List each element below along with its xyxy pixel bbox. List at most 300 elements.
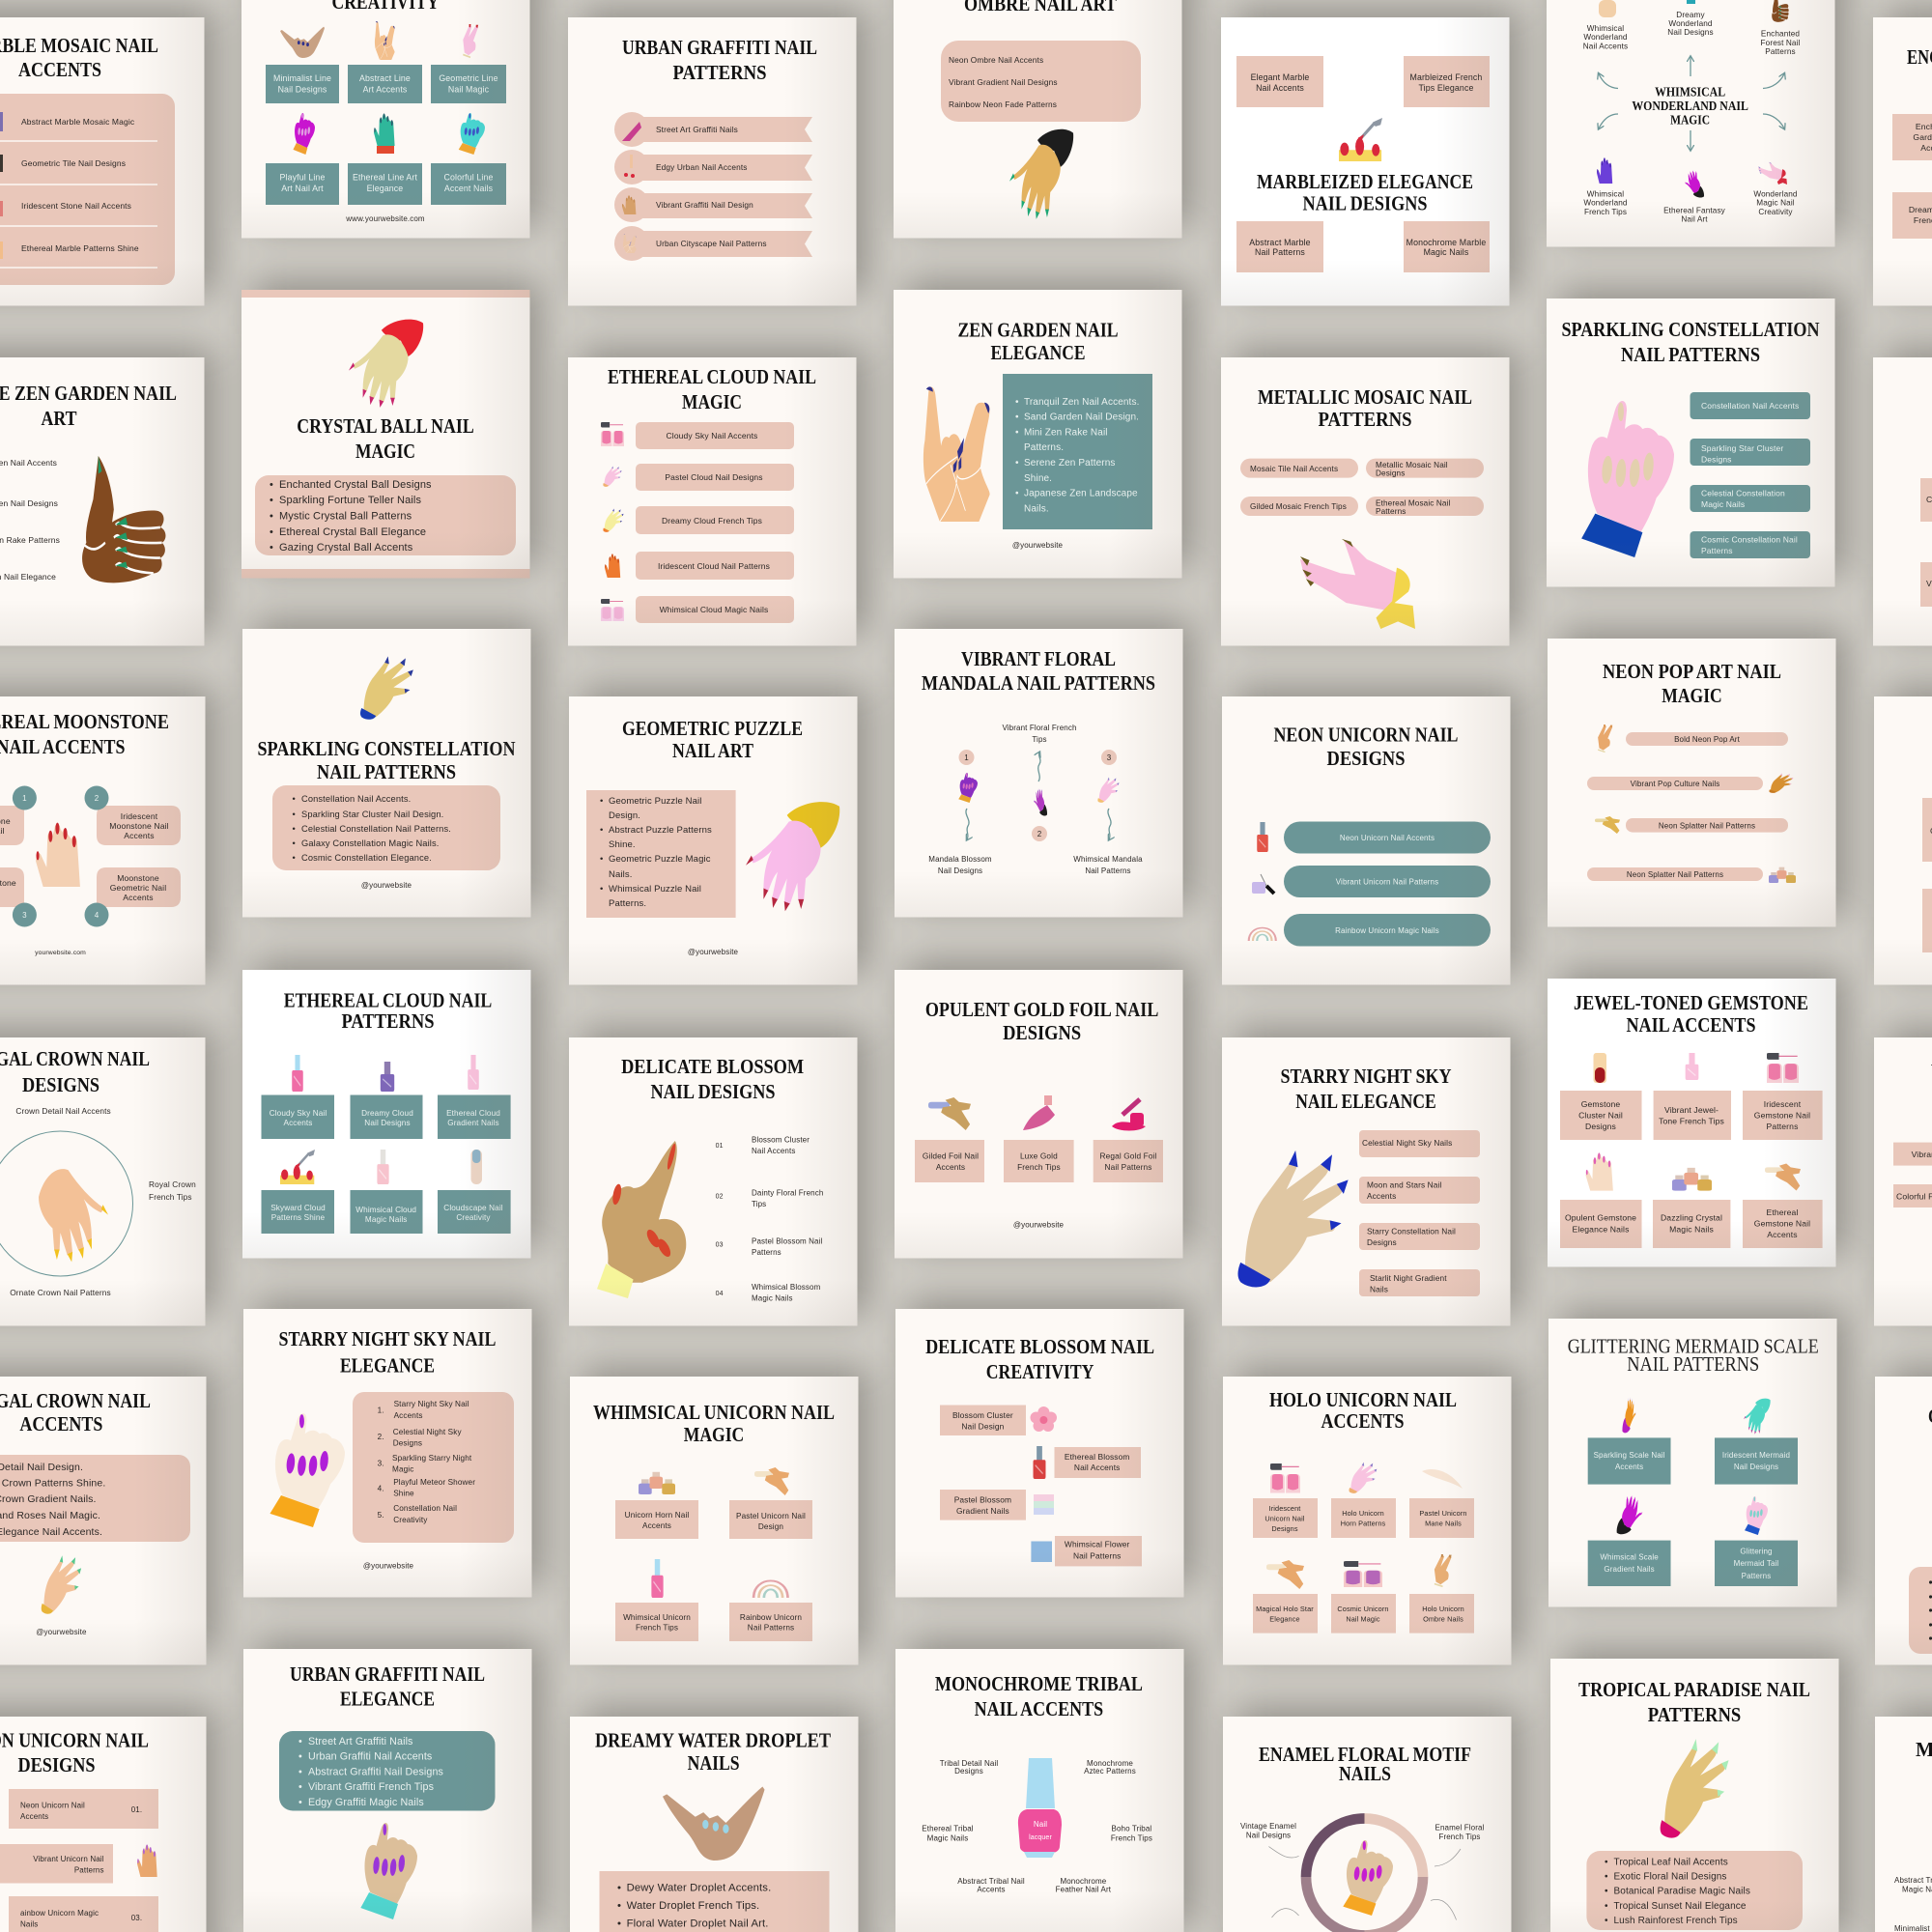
boxes: Elegance Nails — [1572, 1224, 1630, 1234]
ribbons: Edgy Urban Nail Accents — [656, 162, 748, 172]
list panel: Enchanted Crystal Ball Designs — [279, 479, 432, 491]
title — [1259, 1743, 1471, 1785]
list panel: Rainbow Neon Fade Patterns — [949, 99, 1057, 109]
boxes — [1236, 56, 1490, 272]
bottom labels: Nail Art — [1681, 214, 1708, 224]
panel: Urban Graffiti Nail Patterns — [568, 17, 856, 305]
pills: Neon Splatter Nail Patterns — [1627, 870, 1723, 879]
boxes: Starry Constellation Nail — [1367, 1227, 1456, 1236]
list panel: Mystic Crystal Ball Patterns — [279, 510, 412, 522]
teal boxes: Patterns — [1701, 546, 1733, 555]
ribbons: Urban Cityscape Nail Patterns — [656, 239, 767, 248]
icons — [1617, 1397, 1771, 1535]
circle with hand — [0, 1131, 133, 1276]
list panel: Botanical Paradise Magic Nails — [1613, 1887, 1750, 1897]
list rows: Neon Unicorn Nail — [20, 1801, 85, 1809]
teal boxes: Skyward Cloud — [270, 1204, 326, 1212]
list panel: • — [292, 794, 296, 804]
boxes: Ethereal — [1767, 1208, 1798, 1217]
numbered list panel: Accents — [394, 1411, 423, 1420]
website: @yourwebsite — [1012, 541, 1064, 550]
panel: Opulent Gold Foil Nail Designs — [895, 970, 1182, 1258]
numbered badges: 3 — [22, 911, 27, 920]
list boxes: Cloudy Sky Nail Accents — [667, 431, 757, 440]
list box: • — [617, 1883, 621, 1894]
title: ELEGANCE — [991, 341, 1086, 364]
numbered list panel: 1. — [378, 1406, 384, 1414]
boxes: Marbleized French — [1410, 72, 1482, 82]
teal boxes: Nail Magic — [448, 85, 490, 95]
icon: hand — [360, 656, 413, 720]
list boxes — [636, 422, 794, 623]
panel: Jewel-Toned Gemstone Nail Accents — [1548, 979, 1835, 1267]
icon: large polish bottle: lacquer — [1029, 1834, 1052, 1841]
top labels: Whimsical — [1587, 24, 1624, 33]
boxes: Ethereal Blossom — [1065, 1452, 1129, 1462]
boxes: Holo Unicorn — [1422, 1605, 1464, 1613]
boxes: Pastel Blossom — [954, 1494, 1011, 1504]
title: GEOMETRIC PUZZLE — [622, 717, 803, 740]
boxes: Gradient Nails — [956, 1506, 1009, 1516]
list panel: • — [270, 495, 273, 506]
teal pills: Neon Unicorn Nail Accents — [1340, 834, 1435, 842]
numbered list: Tips — [752, 1200, 766, 1208]
boxes: Gemstone — [1581, 1099, 1620, 1109]
title: ELEGANCE — [340, 1688, 435, 1711]
list panel: Geometric Tile Nail Designs — [21, 158, 126, 168]
title: HOLO UNICORN NAIL — [1269, 1388, 1457, 1411]
bottom labels: French Tips — [1584, 208, 1627, 216]
labels — [1894, 1876, 1932, 1932]
list panel: Vibrant Gradient Nail Designs — [949, 77, 1058, 87]
teal boxes: Elegance — [367, 184, 403, 193]
numbered list panel: Magic — [392, 1465, 413, 1474]
list panel: • — [1605, 1872, 1608, 1882]
icons: hands — [280, 21, 485, 155]
boxes: Gemstone Nail — [1754, 1111, 1810, 1121]
boxes: Magical Holo Star — [1256, 1605, 1314, 1613]
title: OPULENT GOLD FOIL NAIL — [925, 998, 1158, 1021]
title: TROPICAL PARADISE NAIL — [1578, 1678, 1810, 1701]
title: ETHEREAL CLOUD NAIL — [284, 988, 492, 1011]
title: NAIL ACCENTS — [975, 1697, 1103, 1720]
top labels: Wonderland — [1583, 33, 1628, 42]
labels: Vibrant Floral French — [1002, 724, 1077, 732]
title — [1269, 1388, 1457, 1433]
icon: gradient swatch — [1034, 1494, 1054, 1515]
labels: Accents — [977, 1886, 1006, 1893]
teal pills — [1284, 821, 1491, 947]
title: URBAN GRAFFITI NAIL — [290, 1662, 485, 1686]
title: DREAMY WATER DROPLET — [595, 1729, 831, 1752]
list panel — [272, 785, 500, 870]
bottom icons — [1597, 157, 1787, 197]
panel: right edge card 4 — [1874, 1037, 1932, 1325]
boxes: Opulent Gemstone — [1565, 1212, 1636, 1222]
boxes: Nail Accents — [1256, 83, 1304, 93]
labels: Monochrome — [1060, 1877, 1106, 1886]
teal boxes: Minimalist Line — [273, 73, 331, 83]
pills: Neon Splatter Nail Patterns — [1659, 822, 1755, 831]
list panel: • — [292, 853, 296, 863]
title — [595, 1729, 831, 1775]
ribbons — [614, 112, 812, 261]
title: VIBRANT FLORAL — [961, 647, 1116, 670]
numbered badges: 2 — [95, 794, 99, 803]
title — [608, 365, 816, 413]
title: WHIMSICAL UNICORN NAIL — [593, 1401, 835, 1424]
list panel: • — [292, 824, 296, 834]
title — [0, 1047, 150, 1096]
title: MONOCHROME TRIBAL — [935, 1672, 1143, 1695]
boxes: Nails — [1370, 1285, 1388, 1294]
title — [1603, 660, 1781, 707]
top labels: Dreamy — [1676, 11, 1705, 19]
panel: Urban Graffiti Nail Elegance — [243, 1649, 531, 1932]
icon: large polish bottle — [1018, 1758, 1062, 1858]
bottom labels: Whimsical — [1587, 189, 1624, 199]
numbered list: Nail Accents — [752, 1147, 795, 1155]
teal list box: • — [1015, 458, 1019, 469]
title: NAIL PATTERNS — [1621, 343, 1760, 366]
list panel: Cosmic Constellation Elegance. — [301, 853, 432, 863]
list box: Design. — [609, 810, 640, 821]
teal boxes: Cloudy Sky Nail — [270, 1109, 327, 1118]
panel: Serene Zen Garden Nail Art — [0, 357, 205, 645]
list rows: 01. — [131, 1805, 142, 1814]
list panel: • — [292, 838, 296, 848]
teal list box — [1003, 374, 1152, 529]
title: DESIGNS — [17, 1753, 95, 1776]
teal boxes: Nail Designs — [1734, 1463, 1778, 1471]
ribbons: Street Art Graffiti Nails — [656, 125, 738, 134]
list box: • — [600, 884, 603, 895]
teal boxes: Dreamy Cloud — [361, 1109, 413, 1118]
teal pills: Rainbow Unicorn Magic Nails — [1335, 926, 1439, 935]
teal boxes — [261, 1095, 511, 1234]
icon: hand — [1661, 1739, 1729, 1838]
boxes — [1253, 1498, 1474, 1634]
list boxes: Whimsical Cloud Magic Nails — [660, 605, 768, 614]
panel: Zen Garden Nail Elegance — [894, 290, 1182, 578]
teal list box: Sand Garden Nail Design. — [1024, 412, 1139, 423]
boxes: Vibrant Jewel- — [1664, 1105, 1719, 1115]
panel: Whimsical Unicorn Nail Magic — [570, 1377, 858, 1665]
icon: hand — [349, 320, 423, 408]
number circles — [958, 750, 1117, 841]
bottom labels: Creativity — [1758, 208, 1793, 216]
top labels: Nail Accents — [1583, 42, 1628, 50]
labels — [922, 1759, 1152, 1893]
boxes: Unicorn Horn Nail — [625, 1511, 689, 1520]
top labels: Enchanted — [1761, 29, 1800, 39]
boxes: Celestial Night Sky Nails — [1362, 1138, 1452, 1148]
list panel: • — [1605, 1857, 1608, 1867]
teal list box: • — [1015, 427, 1019, 439]
panel: right edge card 6 — [1875, 1717, 1932, 1932]
icon: rock hand — [923, 386, 990, 522]
panel: Monochrome Tribal Nail Accents — [895, 1649, 1184, 1932]
labels: Vintage Enamel — [1240, 1822, 1296, 1831]
teal boxes: Patterns — [1742, 1572, 1771, 1580]
numbered badges — [13, 786, 108, 927]
title: NEON POP ART NAIL — [1603, 660, 1781, 683]
boxes: Mane Nails — [1425, 1519, 1462, 1528]
teal boxes: Accents — [1615, 1463, 1643, 1471]
boxes: Elegant Marble — [1251, 72, 1309, 82]
list panel: • — [298, 1797, 302, 1808]
center title — [1632, 85, 1748, 128]
wavy arrows — [966, 753, 1111, 839]
boxes: Starlit Night Gradient — [1370, 1273, 1447, 1283]
website: @yourwebsite — [363, 1562, 414, 1571]
boxes: Monochrome Marble — [1406, 238, 1486, 247]
panel: Delicate Blossom Nail Designs — [569, 1037, 858, 1325]
list panel: • — [1605, 1887, 1608, 1897]
boxes: Horn Patterns — [1341, 1519, 1386, 1528]
website: www.yourwebsite.com — [345, 214, 425, 223]
title: NEON UNICORN NAIL — [1273, 723, 1459, 746]
panel: right edge card 5 — [1875, 1377, 1932, 1665]
teal boxes: Patterns Shine — [271, 1213, 326, 1222]
callouts: Accents — [124, 831, 155, 840]
title: PATTERNS — [342, 1009, 435, 1033]
pills: Ethereal Mosaic Nail — [1376, 499, 1450, 508]
icon: bottle — [1034, 1446, 1045, 1479]
boxes: Nail Patterns — [1073, 1550, 1121, 1560]
boxes: Whimsical Unicorn — [623, 1613, 691, 1622]
icon: fist hand — [1581, 401, 1674, 557]
boxes — [1893, 1143, 1932, 1208]
labels: French Tips — [1438, 1833, 1481, 1841]
panel: Holo Unicorn Nail Accents — [1223, 1377, 1511, 1665]
boxes: Accents — [936, 1162, 965, 1172]
numbered list panel — [353, 1392, 514, 1543]
bottom labels: Magic Nail — [1756, 199, 1795, 208]
title — [1578, 1678, 1810, 1726]
teal boxes: Magic Nails — [1701, 499, 1745, 509]
pills: Metallic Mosaic Nail — [1376, 461, 1448, 469]
boxes: Pastel Unicorn Nail — [736, 1512, 806, 1520]
title: MAGIC — [1662, 684, 1722, 707]
numbered list panel: Celestial Night Sky — [393, 1428, 462, 1436]
icon: hand — [42, 1555, 81, 1614]
numbered list: 02 — [716, 1194, 724, 1201]
title — [925, 1335, 1154, 1383]
numbered list panel: Starry Night Sky Nail — [394, 1400, 469, 1408]
title: CRYSTAL BALL NAIL — [297, 414, 474, 438]
boxes: Magic Nails — [1669, 1224, 1714, 1234]
labels: Ornate Crown Nail Patterns — [10, 1288, 111, 1297]
icon: hand — [1238, 1151, 1349, 1287]
icon: hand — [360, 1823, 417, 1919]
boxes: Whimsical Flower — [1065, 1539, 1129, 1548]
bands — [242, 290, 529, 578]
title — [1568, 1334, 1819, 1376]
ring chart — [1306, 1818, 1423, 1932]
panel: Enamel Floral Motif Nails — [1223, 1717, 1511, 1932]
callouts: Geometric Nail — [110, 883, 166, 893]
panel: Geometric Puzzle Nail Art — [569, 696, 858, 985]
numbered list panel: Playful Meteor Shower — [393, 1478, 475, 1487]
center title: MAGIC — [1670, 114, 1710, 128]
icon: hand — [36, 823, 80, 887]
teal list box: • — [1015, 397, 1019, 408]
list rows: Patterns — [74, 1865, 104, 1874]
labels: Nail Designs — [938, 867, 982, 875]
teal boxes: Art Nail Art — [281, 184, 324, 193]
boxes: Nail Design — [961, 1422, 1005, 1432]
teal boxes: Creativity — [456, 1213, 491, 1222]
title — [290, 1662, 485, 1711]
icons — [639, 1467, 789, 1598]
arrows — [1599, 57, 1784, 150]
teal boxes: Designs — [1701, 455, 1732, 465]
panel: Whimsical Wonderland Nail Magic — [1547, 0, 1835, 247]
labels — [10, 1106, 196, 1297]
panel: Starry Night Sky Nail Elegance list — [1222, 1037, 1511, 1325]
list panel: Abstract Marble Mosaic Magic — [21, 117, 135, 127]
labels: Mandala Blossom — [928, 855, 992, 864]
title: MAGIC — [684, 1423, 744, 1446]
icon: hand — [746, 802, 839, 911]
list rows: Nails — [20, 1919, 38, 1928]
boxes: Magic Nails — [1424, 247, 1469, 257]
labels: Crown Detail Nail Accents — [15, 1106, 111, 1116]
callouts — [0, 806, 181, 907]
title — [1257, 170, 1473, 214]
labels: Designs — [954, 1767, 983, 1776]
title: ACCENTS — [18, 58, 101, 81]
teal boxes: Celestial Constellation — [1701, 488, 1785, 497]
boxes: Tone French Tips — [1659, 1117, 1724, 1126]
pills: Gilded Mosaic French Tips — [1250, 502, 1347, 511]
boxes — [915, 1140, 1163, 1182]
teal list box: Mini Zen Rake Nail — [1024, 427, 1108, 439]
panel: Neon Pop Art Nail Magic — [1548, 639, 1835, 927]
title — [1281, 1065, 1451, 1113]
icons — [601, 422, 624, 621]
title: ART — [41, 407, 77, 430]
bottom labels: Wonderland — [1583, 199, 1628, 208]
panel: Crystal Ball Nail Magic — [242, 290, 529, 578]
icons: hands — [958, 773, 1120, 815]
boxes: Patterns — [1767, 1122, 1798, 1131]
title: MARBLEIZED ELEGANCE — [1257, 170, 1473, 193]
boxes — [1920, 478, 1932, 607]
labels: French Tips — [149, 1192, 192, 1202]
boxes: Designs — [1585, 1122, 1616, 1131]
pills: Bold Neon Pop Art — [1674, 735, 1741, 744]
title — [593, 1401, 835, 1446]
teal boxes: Sparkling Scale Nail — [1594, 1451, 1665, 1460]
teal list box: Serene Zen Patterns — [1024, 458, 1116, 469]
list panel: Lush Rainforest French Tips — [1613, 1916, 1738, 1926]
panel: right edge card 3 — [1874, 696, 1932, 985]
pills: Patterns — [1376, 507, 1406, 516]
boxes: Holo Unicorn — [1342, 1509, 1384, 1518]
boxes: Ombre Nails — [1423, 1615, 1463, 1623]
bottom labels — [1583, 189, 1798, 224]
teal boxes: Constellation Nail Accents — [1701, 401, 1799, 411]
title: SPARKLING CONSTELLATION — [257, 737, 516, 760]
title — [925, 998, 1158, 1044]
panel: Sparkling Constellation Nail Patterns teal — [1547, 298, 1835, 587]
title — [622, 36, 817, 84]
teal boxes — [266, 65, 506, 205]
labels: Enamel Floral — [1435, 1824, 1484, 1833]
list rows: ainbow Unicorn Magic — [20, 1909, 99, 1918]
center title: WHIMSICAL — [1655, 85, 1725, 100]
labels: Nail Patterns — [1085, 867, 1131, 875]
icons — [928, 1095, 1146, 1130]
top labels: Patterns — [1765, 47, 1796, 56]
title — [0, 710, 169, 758]
boxes: Iridescent — [1269, 1504, 1300, 1513]
list panel: Celestial Constellation Nail Patterns. — [301, 824, 451, 834]
title — [1273, 723, 1459, 770]
title: STARRY NIGHT SKY NAIL — [278, 1327, 497, 1350]
numbered list — [716, 1136, 823, 1302]
title: DELICATE BLOSSOM NAIL — [925, 1335, 1154, 1358]
title: DESIGNS — [22, 1073, 99, 1096]
icon: hand — [1009, 129, 1073, 219]
ribbons: Vibrant Graffiti Nail Design — [656, 200, 753, 210]
list — [0, 458, 60, 582]
boxes — [1560, 1091, 1823, 1248]
teal boxes: Mermaid Tail — [1734, 1559, 1778, 1568]
boxes: Accents — [1767, 1230, 1798, 1239]
website: @yourwebsite — [36, 1628, 87, 1636]
panel: Ethereal Moonstone Nail Accents — [0, 696, 205, 985]
title: URBAN GRAFFITI NAIL — [622, 36, 817, 59]
teal boxes: Art Accents — [363, 85, 408, 95]
boxes: Designs — [1367, 1237, 1397, 1247]
panel: Ethereal Cloud Nail Patterns — [242, 970, 531, 1258]
panel: Marble Mosaic Nail Accents — [0, 17, 205, 305]
list box: Dewy Water Droplet Accents. — [627, 1883, 771, 1894]
panel: Line Art Nail Creativity — [242, 0, 529, 238]
numbered list: 03 — [716, 1242, 724, 1249]
boxes: Nail Patterns — [1255, 247, 1305, 257]
icon: hand — [1343, 1840, 1393, 1916]
labels: Magic Nails — [927, 1833, 968, 1843]
list box: Patterns. — [609, 898, 646, 909]
title: MAGIC — [355, 440, 415, 463]
list box — [586, 790, 736, 918]
numbered list: Blossom Cluster — [752, 1136, 810, 1145]
boxes — [1922, 798, 1932, 952]
title: DESIGNS — [1003, 1021, 1081, 1044]
title: ACCENTS — [19, 1412, 102, 1435]
list panel — [0, 94, 175, 285]
teal boxes: Glittering — [1740, 1548, 1773, 1555]
icon: shaka hand — [663, 1787, 765, 1861]
list panel: Urban Graffiti Nail Accents — [308, 1750, 432, 1762]
title — [0, 1729, 149, 1776]
callouts: Accents — [123, 893, 154, 902]
teal list box: Shine. — [1024, 473, 1052, 484]
list panel: Sparkling Star Cluster Nail Design. — [301, 810, 443, 819]
website: yourwebsite.com — [35, 950, 86, 956]
teal boxes: Nail Designs — [364, 1119, 411, 1127]
labels: Ethereal Tribal — [922, 1824, 974, 1833]
title — [922, 647, 1155, 695]
list panel: • — [270, 526, 273, 538]
teal boxes: Whimsical Scale — [1600, 1553, 1659, 1562]
teal pills: Vibrant Unicorn Nail Patterns — [1336, 878, 1438, 887]
list panel: • — [270, 510, 273, 522]
